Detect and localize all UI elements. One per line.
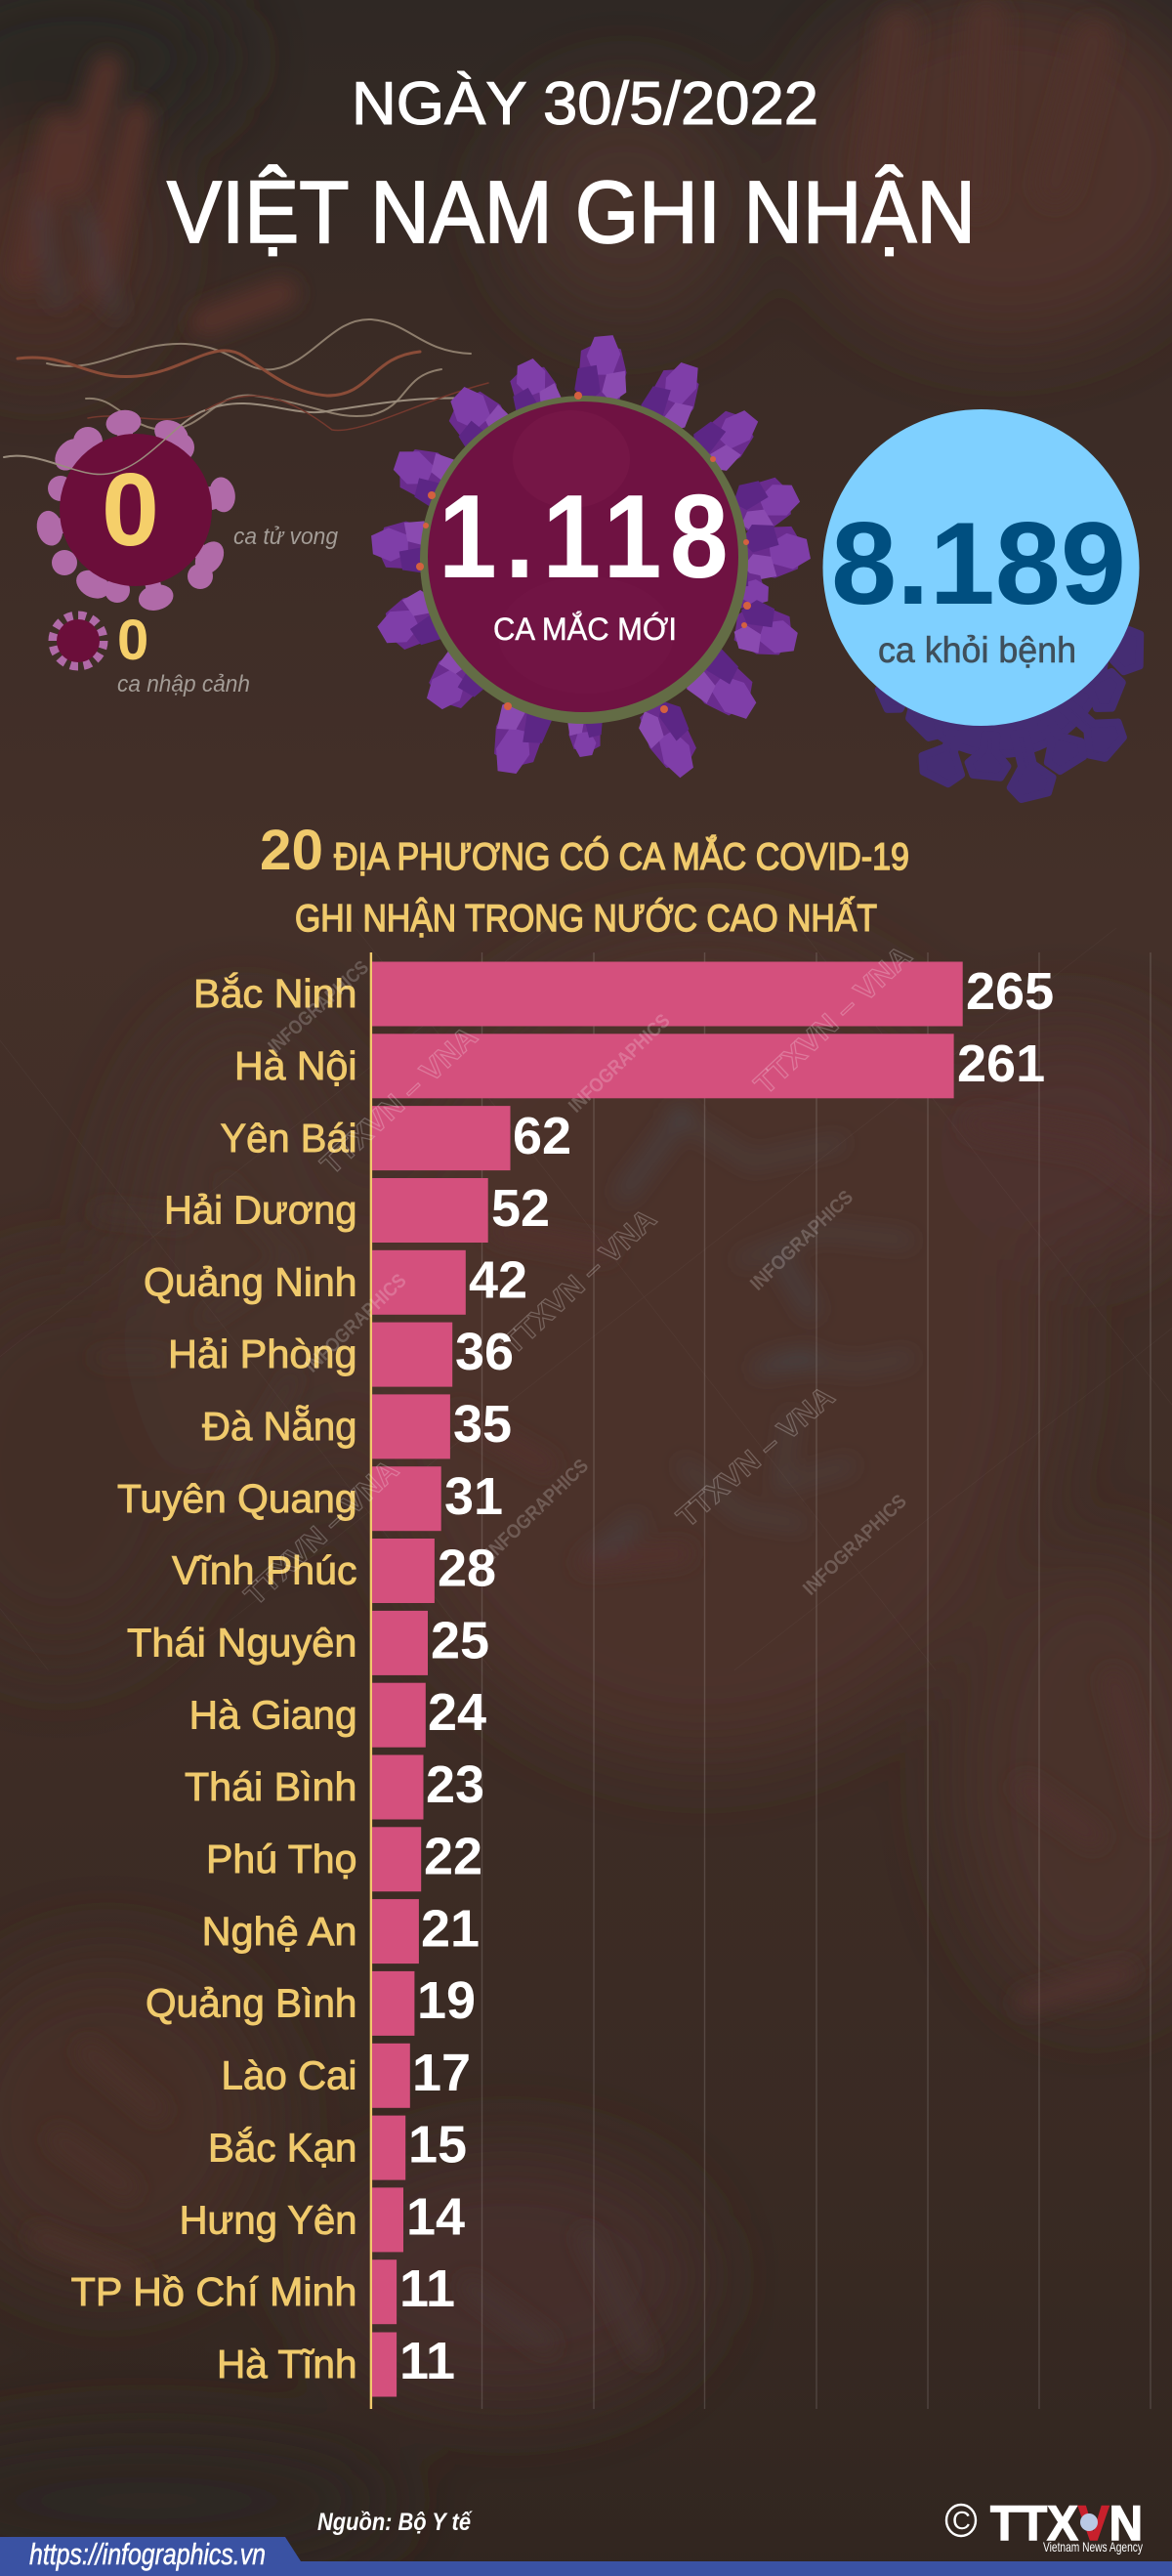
row: Phú Thọ <box>206 1827 482 1891</box>
row: Thái Bình: Thái Bình <box>185 1764 357 1809</box>
chart heading: GHI NHẬN TRONG NƯỚC CAO NHẤT <box>295 897 877 940</box>
label: ca khỏi bệnh: ca khỏi bệnh <box>878 630 1076 670</box>
bar chart <box>71 952 1151 2409</box>
row: Hà Giang: Hà Giang <box>189 1692 357 1737</box>
small virus: ca tử vong <box>4 407 238 613</box>
chart heading <box>260 819 909 940</box>
logo: TTXVN: TTXVN <box>990 2496 1143 2551</box>
value: imported: 0 <box>117 609 148 672</box>
row: Bắc Kạn <box>208 2116 467 2180</box>
watermarks: TTXVN – VNA <box>496 1203 663 1361</box>
watermark lattice <box>0 928 1172 1670</box>
big virus: ca mắc mới <box>369 332 812 784</box>
label: ca nhập cảnh: ca nhập cảnh <box>117 671 250 697</box>
chart heading: ĐỊA PHƯƠNG CÓ CA MẮC COVID-19 <box>334 835 909 878</box>
label: ca tử vong: ca tử vong <box>233 524 339 550</box>
row: Yên Bái <box>221 1106 571 1170</box>
row: Hải Phòng: Hải Phòng <box>168 1331 357 1376</box>
row: Hà Tĩnh <box>217 2332 455 2397</box>
label: ca mắc mới: CA MẮC MỚI <box>493 612 677 647</box>
row: Tuyên Quang: Tuyên Quang <box>117 1476 357 1521</box>
recovered virus and circle <box>822 409 1140 801</box>
row: Hà Nội: 261 <box>957 1035 1045 1093</box>
row: Vĩnh Phúc: Vĩnh Phúc <box>172 1548 357 1593</box>
row: Hà Nội: Hà Nội <box>234 1043 357 1088</box>
chart heading: 20 <box>260 819 323 882</box>
footer band with url <box>0 2537 1172 2576</box>
purple virus <box>877 541 1140 801</box>
title date: NGÀY 30/5/2022 <box>352 70 818 138</box>
row: Nghệ An: 21 <box>421 1899 480 1958</box>
row: Bắc Kạn: 15 <box>408 2116 467 2175</box>
row: Quảng Ninh: Quảng Ninh <box>144 1260 357 1305</box>
watermarks: INFOGRAPHICS <box>746 1187 858 1295</box>
row: Đà Nẵng: Đà Nẵng <box>202 1404 357 1449</box>
watermarks <box>238 940 918 1612</box>
row: TP Hồ Chí Minh: TP Hồ Chí Minh <box>71 2269 356 2314</box>
tiny virus: ca nhập cảnh <box>53 615 104 666</box>
row: Hà Tĩnh: 11 <box>399 2332 455 2390</box>
row: Vĩnh Phúc <box>172 1539 496 1603</box>
value: new cases: 1.118 <box>439 471 729 604</box>
row: Vĩnh Phúc: 28 <box>438 1540 496 1598</box>
row: Đà Nẵng <box>202 1394 512 1458</box>
row: Yên Bái: 62 <box>513 1107 571 1165</box>
watermarks: INFOGRAPHICS <box>565 1010 675 1118</box>
row: Phú Thọ: 22 <box>424 1827 482 1885</box>
row: Hà Giang: 24 <box>428 1683 486 1742</box>
watermarks: INFOGRAPHICS <box>481 1456 593 1564</box>
decorative thin curves <box>4 319 488 475</box>
row: Quảng Ninh: 42 <box>469 1250 527 1309</box>
logo: TTXVN: C <box>952 2506 971 2535</box>
row: Hưng Yên <box>180 2187 465 2252</box>
watermarks: INFOGRAPHICS <box>301 1270 411 1377</box>
row: Đà Nẵng: 35 <box>453 1395 512 1454</box>
row: Nghệ An <box>202 1899 480 1964</box>
row: TP Hồ Chí Minh <box>71 2259 455 2324</box>
row: Hải Dương: 52 <box>491 1179 550 1238</box>
footer band with url: https://infographics.vn <box>29 2537 266 2571</box>
row: Phú Thọ: Phú Thọ <box>206 1837 357 1881</box>
row: Bắc Kạn: Bắc Kạn <box>208 2125 357 2170</box>
row: Lào Cai: 17 <box>412 2044 471 2102</box>
watermarks: TTXVN – VNA <box>238 1454 405 1612</box>
row: Bắc Ninh: 265 <box>966 962 1054 1021</box>
row: Hà Giang <box>189 1683 486 1748</box>
row: Quảng Bình <box>146 1971 476 2036</box>
row: Lào Cai: Lào Cai <box>221 2053 357 2098</box>
row: Tuyên Quang <box>117 1466 503 1531</box>
watermarks: TTXVN – VNA <box>314 1020 483 1181</box>
watermarks: TTXVN – VNA <box>748 940 918 1101</box>
row: Hải Phòng <box>168 1323 514 1387</box>
row: Hải Dương <box>164 1178 550 1243</box>
row: Hưng Yên: Hưng Yên <box>180 2197 357 2242</box>
row: Tuyên Quang: 31 <box>444 1467 503 1526</box>
row: Yên Bái: Yên Bái <box>221 1116 357 1161</box>
row: Quảng Bình: 19 <box>417 1971 476 2030</box>
row: Thái Bình <box>185 1754 484 1819</box>
main title: VIỆT NAM GHI NHẬN <box>167 164 976 262</box>
row: Hải Phòng: 36 <box>455 1323 514 1381</box>
row: Lào Cai <box>221 2044 471 2108</box>
row: Quảng Bình: Quảng Bình <box>146 1981 357 2026</box>
value: deaths: 0 <box>102 452 159 568</box>
watermarks: TTXVN – VNA <box>671 1380 841 1534</box>
row: Hà Nội <box>234 1034 1045 1098</box>
row: Thái Nguyên: 25 <box>431 1611 489 1669</box>
row: Hà Tĩnh: Hà Tĩnh <box>217 2342 357 2386</box>
row: Thái Nguyên: Thái Nguyên <box>127 1620 357 1665</box>
value: recovered: 8.189 <box>831 498 1126 629</box>
row: TP Hồ Chí Minh: 11 <box>399 2259 455 2318</box>
row: Hưng Yên: 14 <box>406 2187 465 2246</box>
row: Quảng Ninh <box>144 1250 527 1315</box>
source: Nguồn: Bộ Y tế <box>317 2509 473 2536</box>
watermarks: INFOGRAPHICS <box>265 956 373 1058</box>
row: Thái Bình: 23 <box>426 1755 484 1814</box>
row: Hải Dương: Hải Dương <box>164 1188 357 1233</box>
row: Bắc Ninh: Bắc Ninh <box>193 971 357 1016</box>
row: Bắc Ninh <box>193 961 1054 1026</box>
row: Thái Nguyên <box>127 1611 489 1675</box>
row: Nghệ An: Nghệ An <box>202 1909 357 1954</box>
watermarks: INFOGRAPHICS <box>799 1491 911 1600</box>
